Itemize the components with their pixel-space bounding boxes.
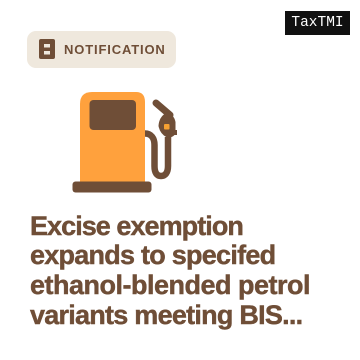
fuel nozzle [156,103,177,138]
title: Excise exemption [30,211,243,241]
watermark: TaxTMI [285,11,350,35]
icon: notification square [39,39,55,59]
pump base [72,182,152,192]
title: expands to specifed [30,240,275,270]
title: variants meeting BIS... [30,300,302,330]
pump body [80,92,145,184]
badge label: NOTIFICATION [64,42,166,57]
watermark: TaxTMI: TaxTMI [291,15,344,31]
pump display [90,100,136,130]
nozzle dot [164,124,170,130]
icon: fuel pump [72,92,177,192]
badge: notification [27,31,176,68]
title: ethanol-blended petrol [30,270,310,300]
fuel hose [145,134,168,176]
